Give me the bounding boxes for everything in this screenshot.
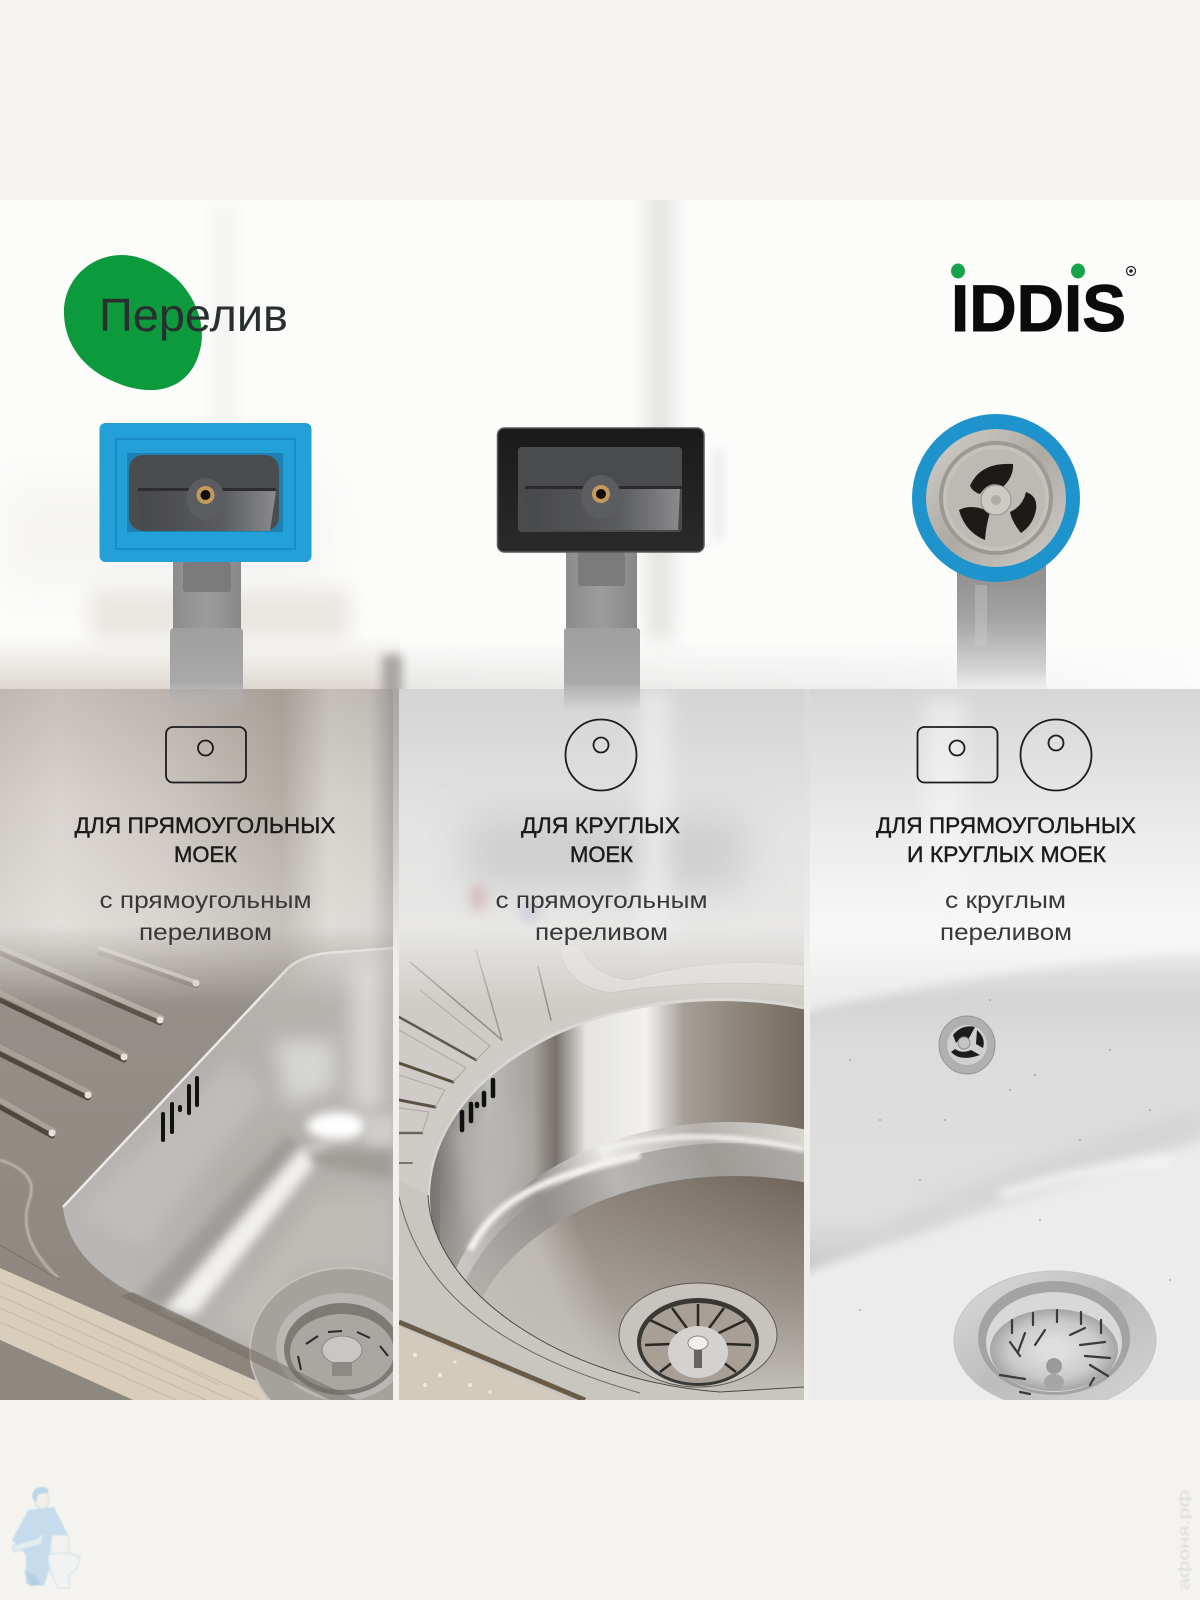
basin wall [790, 950, 1200, 1278]
text block: column 1: переливом [139, 919, 272, 945]
strainer [249, 1267, 393, 1400]
text block: column 1: МОЕК [174, 842, 237, 867]
overflow product: black rectangular [498, 428, 704, 712]
strainer [619, 1283, 777, 1387]
granite speckle [849, 999, 1171, 1311]
granite and edge [399, 1327, 570, 1400]
panel: glass overlay, round sink column [399, 689, 804, 1020]
overflow slots [462, 1080, 493, 1130]
overflow product: blue rectangular [100, 423, 312, 712]
text block: column 3: ДЛЯ ПРЯМОУГОЛЬНЫХ [876, 813, 1136, 838]
small overflow [939, 1016, 995, 1074]
bowl lower rim mask [428, 1204, 804, 1390]
text block: column 2 [496, 813, 708, 945]
text block: column 2: ДЛЯ КРУГЛЫХ [521, 813, 680, 838]
bowl [428, 998, 804, 1213]
heading blob [64, 255, 202, 390]
panel: granite sink column [810, 951, 1200, 1400]
logo: IDDIS: IDDIS [951, 271, 1126, 345]
panel: blurred kitchen backdrop [0, 170, 1200, 705]
watermark icon: plumber [12, 1487, 80, 1588]
watermark text: афоня.рф [1176, 1490, 1193, 1590]
sink icon: rectangular (column 1) [166, 727, 246, 782]
panel: glass overlay, rectangular sink column [0, 689, 393, 1020]
wood worktop [0, 1268, 268, 1400]
sink notch [567, 967, 804, 994]
text block: column 3: с круглым [945, 887, 1066, 913]
overflow slots [163, 1078, 197, 1140]
radial ribs [399, 950, 551, 1163]
text block: column 1: с прямоугольным [100, 887, 312, 913]
panel: glass overlay, granite sink column [810, 689, 1200, 986]
sink icon: round (column 3) [1020, 720, 1092, 790]
column gaps [393, 689, 810, 1400]
sink icon: round (column 2) [566, 720, 636, 790]
text block: column 2: МОЕК [570, 842, 633, 867]
overflow product: round [912, 414, 1080, 690]
text block: column 2: с прямоугольным [496, 887, 708, 913]
text block: column 3: переливом [940, 919, 1072, 945]
vent holes [970, 464, 1013, 494]
text block: column 2: переливом [535, 919, 668, 945]
panel: rectangular sink column [0, 932, 393, 1400]
strainer [954, 1271, 1156, 1409]
text block: column 1 [74, 813, 336, 945]
sink icon: rectangular (column 3) [918, 727, 998, 782]
text block: column 3: И КРУГЛЫХ МОЕК [907, 842, 1106, 867]
bowl band [456, 1122, 804, 1292]
sink bowl [63, 950, 393, 1348]
title: Перелив [99, 289, 288, 341]
text block: column 3 [876, 813, 1136, 945]
panel: round sink column [399, 941, 804, 1400]
drainer notch [0, 1160, 58, 1278]
bowl floor [482, 1176, 804, 1380]
worktop front shade [120, 1292, 357, 1400]
text block: column 1: ДЛЯ ПРЯМОУГОЛЬНЫХ [74, 813, 336, 838]
drainboard ribs [0, 947, 200, 1136]
